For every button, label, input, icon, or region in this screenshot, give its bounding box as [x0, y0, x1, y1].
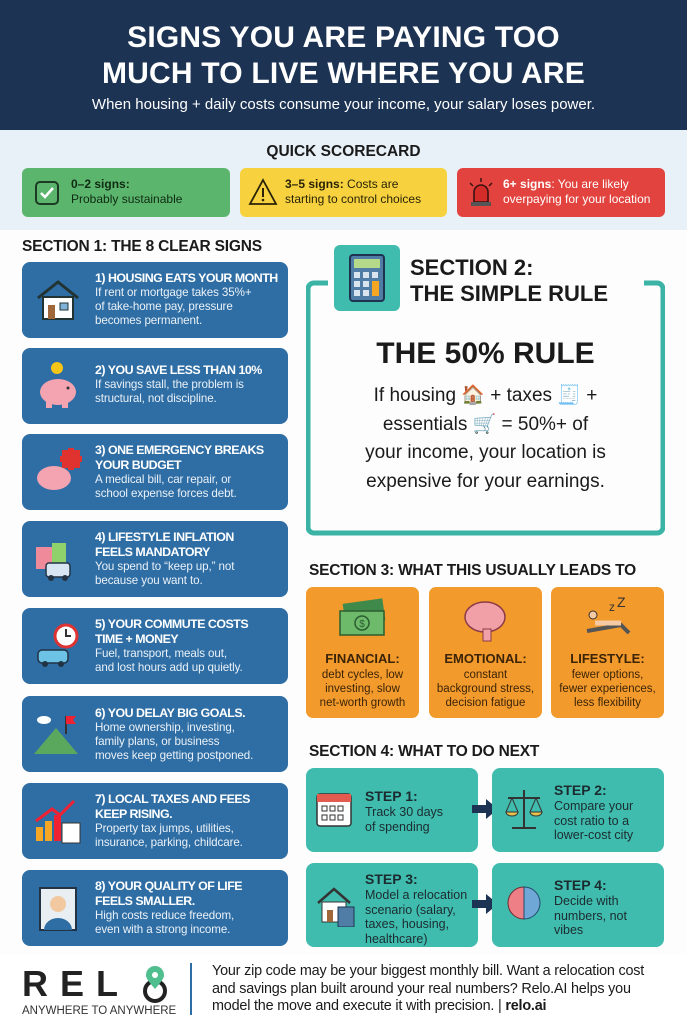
card: lifestyle: LIFESTYLE: — [570, 651, 645, 666]
card: lifestyle: fewer options, — [572, 669, 643, 681]
rule title: THE 50% RULE — [376, 337, 595, 370]
icon: scales — [506, 790, 542, 829]
sign 1 — [22, 262, 288, 338]
sign 6: family plans, or business — [95, 735, 219, 748]
step 3 — [306, 863, 478, 947]
score: green — [22, 168, 230, 217]
logo: ANYWHERE TO ANYWHERE — [22, 1005, 176, 1017]
title: MUCH TO LIVE WHERE YOU ARE — [102, 57, 585, 90]
sign 8: 8) YOUR QUALITY OF LIFE — [95, 879, 242, 893]
sign 8: FEELS SMALLER. — [95, 894, 195, 908]
sign 2: If savings stall, the problem is — [95, 378, 244, 391]
rule text: your income, your location is — [365, 442, 606, 463]
rule text: If housing 🏠 + taxes 🧾 + — [374, 385, 597, 406]
icon: clock and car — [37, 624, 78, 667]
sign 7: Property tax jumps, utilities, — [95, 822, 234, 835]
icon: bar chart tax — [35, 800, 80, 844]
scorecard band — [0, 130, 687, 230]
card: financial: debt cycles, low — [322, 669, 403, 681]
icon: brain two-color — [508, 886, 540, 920]
title: SIGNS YOU ARE PAYING TOO — [127, 21, 560, 54]
icon: calendar — [316, 793, 352, 827]
card: emotional — [429, 587, 542, 718]
sign 4 — [22, 521, 288, 597]
section 2 heading: THE SIMPLE RULE — [410, 281, 608, 306]
sign 6: 6) YOU DELAY BIG GOALS. — [95, 706, 245, 720]
header — [0, 0, 687, 130]
sign 3: A medical bill, car repair, or — [95, 473, 231, 486]
score: yellow: starting to control choices — [285, 192, 421, 206]
step 2: cost ratio to a — [554, 814, 629, 828]
sign 4: You spend to “keep up,” not — [95, 560, 234, 573]
icon: person portrait — [39, 887, 77, 931]
sign 6: Home ownership, investing, — [95, 721, 235, 734]
sign 8: even with a strong income. — [95, 923, 230, 936]
step 3: healthcare) — [365, 932, 428, 946]
footer — [0, 955, 687, 1024]
subtitle: When housing + daily costs consume your income, your salary loses power. — [92, 96, 595, 113]
section 4 heading: SECTION 4: WHAT TO DO NEXT — [309, 743, 539, 760]
section 3 heading: SECTION 3: WHAT THIS USUALLY LEADS TO — [309, 562, 636, 579]
sign 1: of take-home pay, pressure — [95, 300, 233, 313]
sign 1: becomes permanent. — [95, 314, 202, 327]
sign 8 — [22, 870, 288, 946]
card: lifestyle: fewer experiences, — [559, 683, 656, 695]
step 3: taxes, housing, — [365, 917, 449, 931]
step 1: Track 30 days — [365, 805, 443, 819]
sign 3: 3) ONE EMERGENCY BREAKS — [95, 443, 264, 457]
icon: house calculator — [317, 888, 354, 927]
icon: money — [339, 598, 386, 636]
arrow 2 — [472, 894, 492, 914]
card: financial: net-worth growth — [320, 697, 405, 709]
section 2 heading: SECTION 2: — [410, 255, 533, 280]
card: lifestyle: less flexibility — [574, 697, 641, 709]
sign 7: KEEP RISING. — [95, 807, 172, 821]
sign 5: TIME + MONEY — [95, 632, 178, 646]
footer text: and savings plan built around your real numbers? Relo.AI helps you — [212, 980, 631, 996]
logo — [22, 963, 176, 1017]
icon: piggy bank — [40, 362, 76, 408]
title — [102, 21, 585, 90]
divider — [190, 963, 192, 1015]
sign 5: 5) YOUR COMMUTE COSTS — [95, 617, 248, 631]
footer text — [212, 963, 644, 1014]
card: financial — [306, 587, 419, 718]
icon: lounger zzz: z — [609, 600, 615, 614]
sign 6: moves keep getting postponed. — [95, 749, 253, 762]
step 2: lower-cost city — [554, 828, 633, 842]
step 4: vibes — [554, 923, 583, 937]
card: emotional: EMOTIONAL: — [444, 651, 527, 666]
card: emotional: background stress, — [437, 683, 534, 695]
footer text: Your zip code may be your biggest monthly bill. Want a relocation cost — [212, 963, 644, 979]
sign 5: and lost hours add up quietly. — [95, 661, 243, 674]
step 3: STEP 3: — [365, 871, 418, 887]
sign 4: because you want to. — [95, 574, 203, 587]
step 2: Compare your — [554, 799, 633, 813]
icon: bags and car — [36, 543, 71, 581]
sign 2 — [22, 348, 288, 424]
score: green: 0–2 signs: — [71, 177, 130, 191]
step 1: of spending — [365, 820, 430, 834]
rule text: expensive for your earnings. — [366, 470, 605, 492]
score: red: 6+ signs: You are likely — [503, 177, 629, 191]
step 4: numbers, not — [554, 908, 627, 922]
step 4: Decide with — [554, 894, 619, 908]
card: financial: investing, slow — [325, 683, 400, 695]
rule text: essentials 🛒 = 50%+ of — [383, 414, 588, 434]
icon: calculator — [334, 245, 400, 311]
score: yellow — [240, 168, 447, 217]
logo: REL — [22, 963, 130, 1004]
step 2 — [492, 768, 664, 852]
icon: mountain flag — [34, 716, 78, 754]
icon: broken piggy — [37, 448, 82, 490]
sign 8: High costs reduce freedom, — [95, 909, 234, 922]
sign 3: school expense forces debt. — [95, 487, 237, 500]
step 3: scenario (salary, — [365, 902, 456, 916]
step 1 — [306, 768, 478, 852]
score: yellow: 3–5 signs: Costs are — [285, 177, 398, 191]
step 2: STEP 2: — [554, 782, 607, 798]
icon: money: $ — [359, 619, 365, 630]
card: emotional: decision fatigue — [446, 697, 525, 709]
sign 1: If rent or mortgage takes 35%+ — [95, 286, 252, 299]
footer text: model the move and execute it with precision. | relo.ai — [212, 998, 546, 1014]
sign 4: FEELS MANDATORY — [95, 545, 210, 559]
card: financial: FINANCIAL: — [325, 651, 400, 666]
step 3: Model a relocation — [365, 888, 467, 902]
sign 7: insurance, parking, childcare. — [95, 836, 243, 849]
step 1: STEP 1: — [365, 788, 418, 804]
teal frame — [306, 280, 665, 536]
scorecard heading: QUICK SCORECARD — [266, 143, 421, 160]
score: red: overpaying for your location — [503, 192, 650, 206]
icon: siren — [470, 178, 492, 206]
icon: check — [35, 181, 59, 205]
icon: brain — [464, 601, 506, 642]
panel: section 2 simple rule — [306, 245, 665, 536]
score: green: Probably sustainable — [71, 192, 182, 206]
icon: house — [37, 280, 79, 320]
sign 5: Fuel, transport, meals out, — [95, 647, 227, 660]
sign 7: 7) LOCAL TAXES AND FEES — [95, 792, 250, 806]
sign 6 — [22, 696, 288, 772]
icon: lounger zzz — [586, 597, 630, 634]
arrow 1 — [472, 799, 492, 819]
sign 2: 2) YOU SAVE LESS THAN 10% — [95, 363, 262, 377]
icon: location pin — [143, 966, 167, 1003]
step 4 — [492, 863, 664, 947]
icon: warning — [248, 178, 278, 205]
score: red — [457, 168, 665, 217]
sign 7 — [22, 783, 288, 859]
card: lifestyle — [551, 587, 664, 718]
sign 5 — [22, 608, 288, 684]
section 1 heading: SECTION 1: THE 8 CLEAR SIGNS — [22, 238, 262, 255]
sign 4: 4) LIFESTYLE INFLATION — [95, 530, 234, 544]
sign 3: YOUR BUDGET — [95, 458, 181, 472]
section 2 heading — [410, 255, 608, 306]
step 4: STEP 4: — [554, 877, 607, 893]
sign 3 — [22, 434, 288, 510]
sign 2: structural, not discipline. — [95, 392, 217, 405]
card: emotional: constant — [464, 669, 507, 681]
rule text — [365, 384, 606, 492]
sign 1: 1) HOUSING EATS YOUR MONTH — [95, 271, 278, 285]
